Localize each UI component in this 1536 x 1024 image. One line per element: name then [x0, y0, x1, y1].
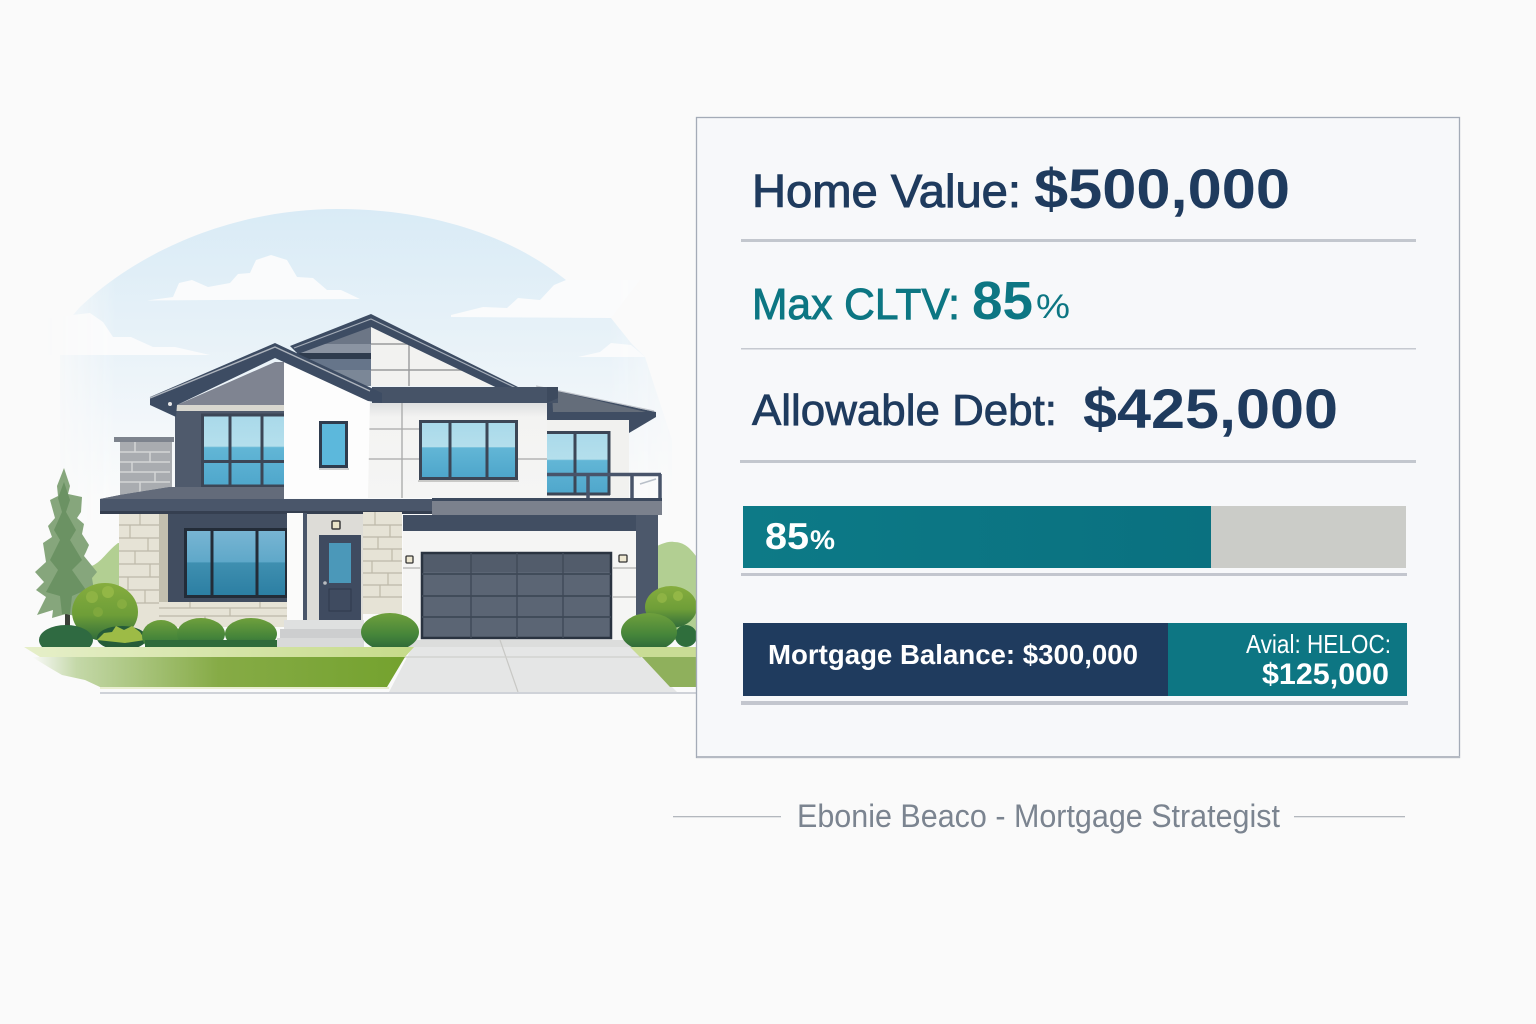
debt split bar: Avial: HELOC: — [1246, 629, 1391, 659]
home value row — [752, 157, 1290, 220]
centre upper window — [418, 420, 519, 482]
CLTV progress bar — [741, 506, 1407, 576]
garage — [403, 531, 636, 640]
balcony window — [547, 431, 610, 495]
debt split bar — [741, 623, 1408, 705]
max CLTV row: % — [1036, 288, 1070, 326]
hills — [88, 542, 696, 640]
white gable tower — [284, 360, 370, 498]
allowable debt row: $425,000 — [1083, 377, 1338, 440]
illustration: house scene — [24, 209, 697, 694]
max CLTV row — [752, 271, 1070, 331]
porch roof — [100, 487, 432, 514]
home value row: $500,000 — [1034, 157, 1290, 220]
balcony band and garage overhang — [403, 498, 662, 615]
allowable debt row — [752, 377, 1338, 440]
CLTV progress bar: % — [810, 525, 835, 555]
front door — [319, 535, 361, 620]
centre upper wall — [368, 387, 558, 498]
stone pillar — [363, 512, 402, 614]
allowable debt row: Allowable Debt: — [752, 386, 1057, 435]
max CLTV row: 85 — [972, 271, 1033, 331]
left roof — [150, 343, 382, 417]
max CLTV row: Max CLTV: — [752, 280, 960, 329]
debt split bar: $125,000 — [1262, 658, 1389, 691]
right hip roof — [536, 386, 656, 433]
garage door — [421, 552, 612, 639]
debt split bar: Mortgage Balance: $300,000 — [768, 639, 1138, 670]
shrubs right — [361, 586, 697, 651]
garage lights — [406, 556, 413, 563]
steps — [277, 620, 364, 647]
tree — [35, 468, 97, 628]
chimney — [114, 437, 174, 498]
lawn — [24, 647, 696, 694]
porch light — [332, 521, 340, 529]
panel: loan figures — [696, 118, 1460, 758]
upper gable — [290, 314, 518, 387]
ground floor left — [119, 513, 287, 631]
driveway — [389, 640, 677, 692]
entry and door — [287, 512, 402, 620]
balcony railing — [547, 474, 661, 498]
footer credit: Ebonie Beaco - Mortgage Strategist — [797, 798, 1280, 834]
CLTV progress bar: 85 — [765, 516, 809, 557]
left upper wall — [175, 362, 284, 490]
sky backdrop — [74, 209, 652, 418]
ground floor window — [184, 528, 287, 598]
home value row: Home Value: — [752, 165, 1021, 217]
shrubs left — [39, 583, 277, 647]
right wall and balcony window — [547, 420, 629, 498]
upper left window — [201, 414, 284, 487]
small window — [319, 421, 349, 470]
